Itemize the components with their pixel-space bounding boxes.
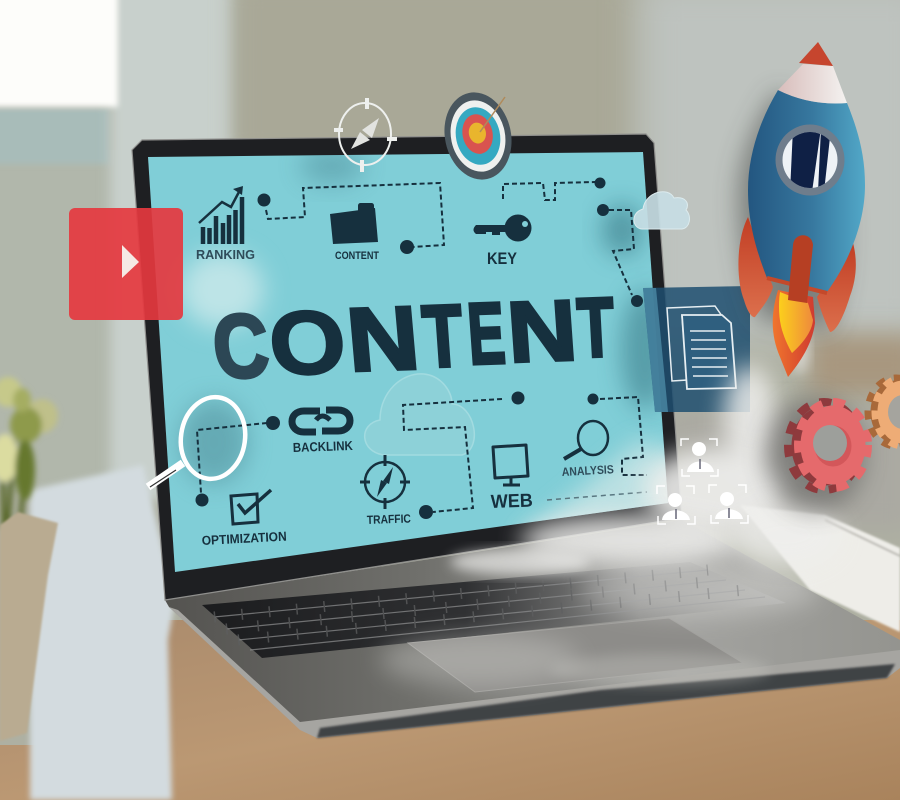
person left <box>657 486 695 524</box>
person top <box>681 439 718 476</box>
rocket fins <box>738 217 773 317</box>
rocket white band <box>778 64 847 103</box>
pale table area <box>30 465 175 800</box>
headline <box>209 281 617 397</box>
screen shading <box>180 148 690 550</box>
item: ranking: RANKING <box>196 248 255 262</box>
icon: target <box>437 86 519 186</box>
laptop <box>132 134 900 738</box>
laptop base <box>165 520 900 733</box>
laptop front edge <box>169 607 900 738</box>
item: backlink <box>292 410 354 455</box>
item: traffic compass: TRAFFIC <box>367 511 411 527</box>
white paper on the right <box>740 505 900 632</box>
item: traffic compass <box>360 455 411 527</box>
rocket window <box>776 124 844 196</box>
rocket centre strut <box>788 235 813 303</box>
item: backlink: BACKLINK <box>293 438 354 455</box>
people icons <box>657 439 748 524</box>
icon: cloud top right <box>634 192 689 229</box>
gear shadow <box>765 397 865 513</box>
gear side <box>788 402 860 490</box>
smoke <box>380 326 840 686</box>
wooden table <box>0 620 900 800</box>
item: key <box>474 214 532 268</box>
headline: T <box>575 281 617 375</box>
rocket flame <box>773 290 815 377</box>
gear side <box>868 378 900 446</box>
headline: N <box>343 288 423 391</box>
headline: N <box>504 282 580 381</box>
item: optimization <box>201 490 287 548</box>
gear face <box>875 378 900 446</box>
icon: magnifier <box>148 393 250 487</box>
potted plant <box>0 377 58 741</box>
item: content folder: CONTENT <box>335 250 379 262</box>
keyboard <box>202 562 786 658</box>
headline: T <box>420 287 466 386</box>
item: optimization: OPTIMIZATION <box>201 529 287 548</box>
connector: top right <box>503 178 643 307</box>
item: web monitor <box>490 445 533 513</box>
connector: analysis <box>547 394 647 500</box>
document card <box>643 286 750 412</box>
rocket body <box>748 90 865 292</box>
laptop lid <box>132 134 682 600</box>
headline: E <box>465 285 508 383</box>
icon: cloud centre <box>365 374 474 455</box>
headline: C <box>209 295 273 397</box>
rocket base strip <box>767 278 827 293</box>
item: analysis: ANALYSIS <box>561 462 614 479</box>
item: analysis <box>561 421 614 479</box>
icon: red gear <box>788 402 868 490</box>
rocket nose <box>799 42 833 66</box>
headline: O <box>265 291 350 394</box>
item: web monitor: WEB <box>490 491 533 513</box>
person right <box>709 485 748 523</box>
rocket shadow <box>738 90 845 330</box>
trackpad <box>408 618 743 692</box>
icon: video play card <box>69 208 183 320</box>
icon: orange gear <box>868 378 900 446</box>
gear face <box>798 402 868 488</box>
gear hole <box>814 426 852 466</box>
item: content folder <box>330 203 379 262</box>
connector: ranking to content <box>258 183 444 254</box>
item: key: KEY <box>487 249 518 268</box>
gear hole <box>888 395 900 429</box>
connector: centre <box>403 392 524 519</box>
icon: compass crosshair <box>334 98 397 172</box>
item: ranking <box>196 186 255 262</box>
connector: optimization <box>196 416 280 506</box>
screen <box>148 152 668 572</box>
rocket <box>738 42 865 377</box>
